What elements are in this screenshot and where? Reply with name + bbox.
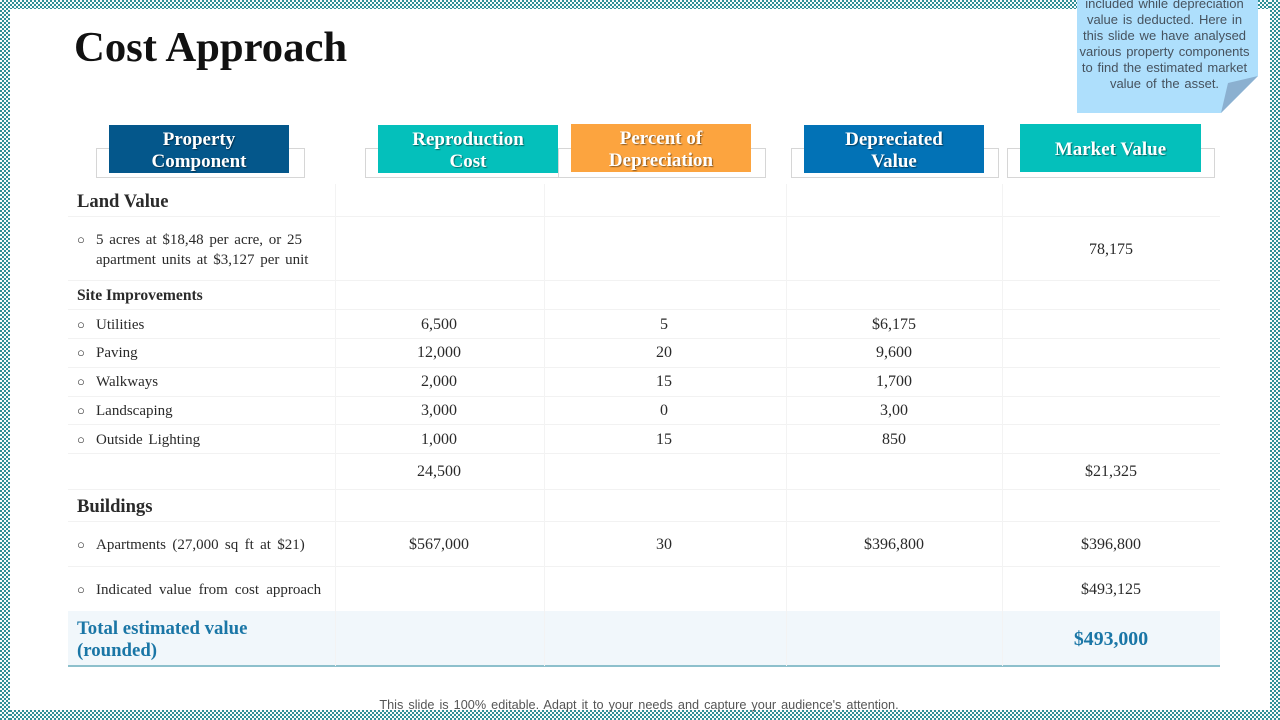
row: land detail: apartment units at $3,127 per unit [96, 252, 308, 268]
row: utilities: $6,175 [872, 316, 916, 333]
row: walkways [77, 373, 912, 390]
row: walkways: ○ [77, 374, 85, 389]
row: total estimated value [77, 618, 247, 661]
row: buildings: Buildings [77, 496, 152, 517]
row: landscaping: 3,00 [880, 402, 908, 419]
row: landscaping: 3,000 [421, 402, 457, 419]
row: landscaping: Landscaping [96, 403, 173, 419]
header: property component: Property [163, 128, 235, 150]
row: outside lighting: ○ [77, 432, 85, 447]
row: paving [77, 344, 912, 361]
callout note: value is deducted. Here in [1087, 12, 1242, 27]
row: walkways: Walkways [96, 374, 158, 390]
row: utilities: 6,500 [421, 316, 457, 333]
row: paving: ○ [77, 345, 85, 360]
callout note: various property components [1079, 44, 1250, 59]
row: utilities: ○ [77, 317, 85, 332]
header: depreciated value [791, 125, 999, 178]
row: utilities [77, 316, 916, 333]
header: percent of depreciation: Depreciation [609, 150, 713, 170]
row: total estimated value: (rounded) [77, 640, 157, 661]
row: land detail: ○ [77, 232, 85, 247]
row: apartments: 30 [656, 536, 672, 553]
row: subtotal: $21,325 [1085, 463, 1137, 480]
header: property component: Component [151, 150, 246, 172]
header: depreciated value: Value [871, 150, 917, 172]
row: site improvements: Site Improvements [77, 287, 203, 304]
row: total estimated value: Total estimated value [77, 618, 247, 639]
footer note: This slide is 100% editable. Adapt it to your needs and capture your audience's attention. [379, 698, 899, 712]
row: indicated value [77, 581, 1141, 598]
callout note: this slide we have analysed [1083, 28, 1246, 43]
row: landscaping: ○ [77, 403, 85, 418]
row: apartments [77, 536, 1141, 553]
row: apartments: Apartments (27,000 sq ft at $21) [96, 537, 305, 553]
row: indicated value: ○ [77, 582, 85, 597]
row: apartments: ○ [77, 537, 85, 552]
row: paving: 12,000 [417, 344, 461, 361]
row: outside lighting [77, 431, 906, 448]
row: indicated value: Indicated value from cost approach [96, 582, 321, 598]
row: landscaping [77, 402, 908, 419]
row: apartments: $396,800 [1081, 536, 1141, 553]
header: reproduction cost [365, 125, 558, 178]
header: reproduction cost: Cost [450, 150, 486, 172]
row: paving: Paving [96, 345, 138, 361]
row: walkways: 15 [656, 373, 672, 390]
row: outside lighting: Outside Lighting [96, 432, 200, 448]
row: land value: Land Value [77, 191, 168, 212]
row: paving: 20 [656, 344, 672, 361]
row: paving: 9,600 [876, 344, 912, 361]
row: indicated value: $493,125 [1081, 581, 1141, 598]
title: Cost Approach [74, 24, 347, 71]
row: walkways: 2,000 [421, 373, 457, 390]
row: utilities: 5 [660, 316, 668, 333]
callout note [1077, 0, 1258, 113]
row: walkways: 1,700 [876, 373, 912, 390]
row: outside lighting: 850 [882, 431, 906, 448]
header: market value [1007, 124, 1215, 178]
header: property component [96, 125, 305, 178]
header: market value: Market Value [1055, 138, 1166, 160]
row: subtotal [417, 463, 1137, 480]
table [68, 611, 1220, 667]
header: reproduction cost: Reproduction [412, 128, 524, 150]
row: apartments: $567,000 [409, 536, 469, 553]
row: land detail [77, 232, 308, 268]
total row band [68, 611, 1220, 665]
row: outside lighting: 15 [656, 431, 672, 448]
value: land: 78,175 [1089, 241, 1133, 258]
row: apartments: $396,800 [864, 536, 924, 553]
row: landscaping: 0 [660, 402, 668, 419]
callout note: to find the estimated market [1082, 60, 1247, 75]
header: depreciated value: Depreciated [845, 128, 943, 150]
row: utilities: Utilities [96, 317, 144, 333]
row: subtotal: 24,500 [417, 463, 461, 480]
value: total: $493,000 [1074, 628, 1148, 650]
row: outside lighting: 1,000 [421, 431, 457, 448]
header: percent of depreciation: Percent of [620, 128, 702, 148]
callout note: value of the asset. [1110, 76, 1219, 91]
row: land detail: 5 acres at $18,48 per acre, or 25 [96, 232, 302, 248]
header: percent of depreciation [559, 124, 766, 178]
